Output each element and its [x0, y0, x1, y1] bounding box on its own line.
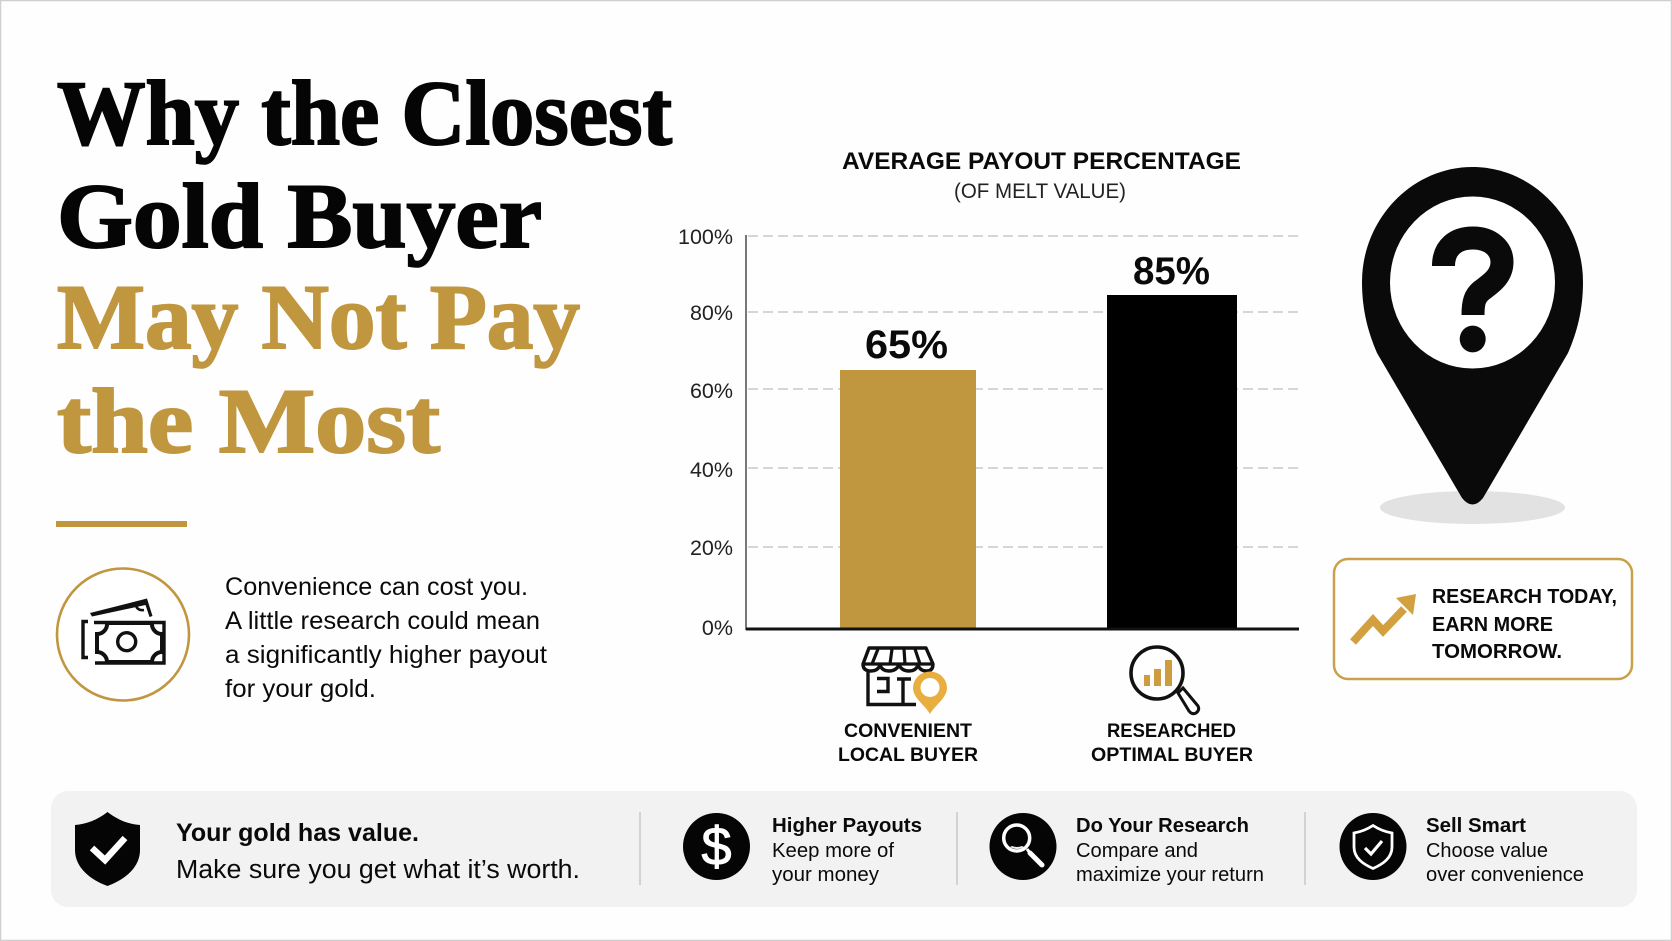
chart heading [842, 148, 1241, 203]
y axis labels: 80% [690, 301, 733, 325]
panel: bottom bar [51, 791, 1637, 907]
intro text [225, 573, 547, 703]
item: higher payouts: $ [701, 817, 732, 877]
callout: research today [1334, 559, 1632, 679]
label: convenient local buyer [838, 720, 978, 766]
item: sell smart: over convenience [1426, 863, 1584, 886]
text: your gold has value: Your gold has value. [176, 819, 419, 847]
callout text: EARN MORE [1432, 613, 1553, 636]
item: higher payouts: Keep more of [772, 839, 894, 862]
y axis labels [678, 225, 733, 640]
item: sell smart: Choose value [1426, 839, 1548, 862]
y axis labels: 20% [690, 536, 733, 560]
label: researched optimal buyer: OPTIMAL BUYER [1091, 744, 1253, 766]
title [57, 62, 672, 472]
intro text: Convenience can cost you. [225, 573, 528, 601]
y axis labels: 100% [678, 225, 733, 249]
bar: convenient local buyer 65% [840, 370, 976, 630]
item: do your research: Compare and [1076, 839, 1198, 862]
item: sell smart [1340, 813, 1584, 886]
item: higher payouts: your money [772, 863, 880, 886]
icon: store with pin [863, 648, 947, 714]
label: convenient local buyer: CONVENIENT [844, 720, 972, 742]
icon: location pin with question mark [1362, 167, 1583, 524]
chart heading: AVERAGE PAYOUT PERCENTAGE [842, 148, 1241, 175]
bar chart [678, 225, 1299, 640]
label: researched optimal buyer: RESEARCHED [1107, 720, 1236, 742]
intro text: A little research could mean [225, 607, 540, 635]
intro text: for your gold. [225, 675, 376, 703]
title: the Most [57, 370, 440, 472]
text: your gold has value [176, 819, 580, 884]
label: convenient local buyer: LOCAL BUYER [838, 744, 978, 766]
icon: money in gold circle [57, 568, 189, 700]
value label 65%: 65% [865, 323, 948, 367]
icon: shield check [75, 812, 140, 886]
intro text: a significantly higher payout [225, 641, 547, 669]
y axis labels: 60% [690, 379, 733, 403]
title: Gold Buyer [57, 165, 542, 267]
chart heading: (OF MELT VALUE) [954, 180, 1126, 203]
item: sell smart: Sell Smart [1426, 814, 1526, 837]
item: higher payouts: Higher Payouts [772, 814, 922, 837]
callout text: TOMORROW. [1432, 640, 1562, 663]
label: researched optimal buyer [1091, 720, 1253, 766]
callout text: RESEARCH TODAY, [1432, 585, 1617, 608]
item: higher payouts [683, 813, 922, 886]
item: do your research: maximize your return [1076, 863, 1264, 886]
icon: magnifier with bars [1131, 647, 1199, 714]
text: your gold has value: Make sure you get what it’s worth. [176, 856, 580, 884]
item: do your research [990, 813, 1264, 886]
title: May Not Pay [57, 266, 580, 368]
y axis labels: 40% [690, 458, 733, 482]
callout text [1432, 585, 1617, 663]
value label 85%: 85% [1133, 250, 1210, 293]
icon: rising arrow [1353, 594, 1416, 642]
title: Why the Closest [57, 62, 672, 164]
y axis labels: 0% [702, 616, 733, 640]
item: do your research: Do Your Research [1076, 814, 1249, 837]
bar: researched optimal buyer 85% [1107, 295, 1237, 630]
